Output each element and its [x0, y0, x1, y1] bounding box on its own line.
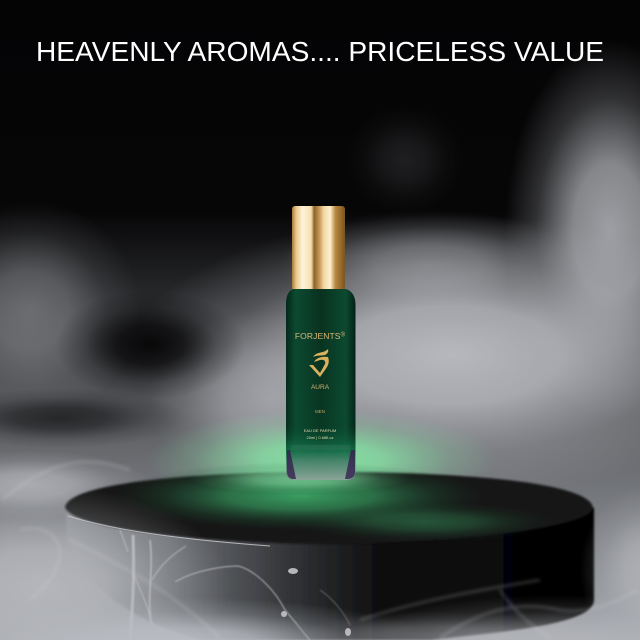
marble flecks [281, 568, 351, 636]
perfume bottle [286, 206, 356, 480]
front edge highlight [68, 516, 270, 546]
product name: AURA [311, 384, 330, 391]
volume label [304, 428, 336, 440]
bottle cap [292, 206, 345, 291]
icon: brand emblem [309, 349, 329, 377]
brand name: ® [341, 332, 346, 338]
bottle glass [286, 289, 356, 480]
pedestal side [66, 508, 594, 640]
marble veins [120, 530, 350, 640]
brand name: FORJENTS [295, 331, 341, 341]
top surface green glow [115, 462, 555, 542]
title: HEAVENLY AROMAS.... PRICELESS VALUE [36, 36, 604, 67]
volume label: 20ml | 0.68fl.oz [306, 435, 334, 440]
pedestal top [65, 472, 593, 544]
volume label: EAU DE PARFUM [304, 428, 336, 433]
gender label: MEN [315, 409, 325, 414]
smoke wisps [2, 462, 638, 638]
